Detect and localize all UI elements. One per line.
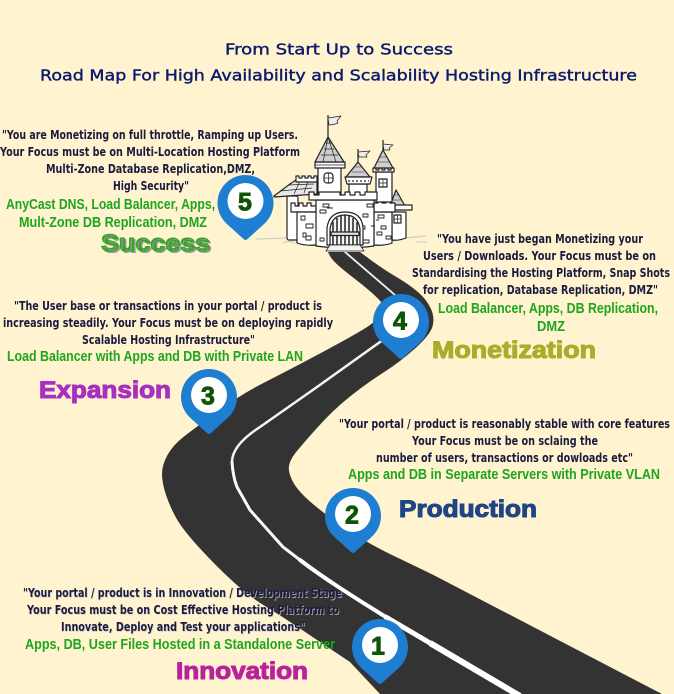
innovation infrastructure: Apps, DB, User Files Hosted in a Standalone Server xyxy=(25,636,335,653)
panel: innovation stage xyxy=(23,586,342,685)
success description xyxy=(0,128,300,193)
icon: pin 5 xyxy=(218,175,274,240)
success description: Multi-Zone Database Replication,DMZ, xyxy=(46,162,255,176)
success description: Your Focus must be on Multi-Location Hosting Platform xyxy=(0,145,300,159)
expansion description xyxy=(3,299,333,347)
expansion description: increasing steadily. Your Focus must be on deploying rapidly xyxy=(3,316,333,330)
innovation description: Your Focus must be on Cost Effective Hosting Platform to xyxy=(26,603,339,617)
monetization heading: Monetization xyxy=(432,337,596,364)
expansion infrastructure: Load Balancer with Apps and DB with Private LAN xyxy=(7,348,303,365)
icon: pin 2 xyxy=(325,488,381,553)
icon: pin 3 xyxy=(181,369,237,434)
icon: pin 3: 3 xyxy=(201,382,215,410)
innovation description: "Your portal / product is in Innovation / Development Stage xyxy=(23,586,342,600)
production description xyxy=(339,417,670,465)
success infrastructure: Mult-Zone DB Replication, DMZ xyxy=(19,214,207,231)
panel: monetization stage xyxy=(412,232,670,364)
icon: castle xyxy=(256,115,427,251)
icon: pin 1 xyxy=(352,619,408,684)
monetization description xyxy=(412,232,670,297)
title xyxy=(40,40,637,84)
icon: pin 2: 2 xyxy=(345,502,359,530)
monetization infrastructure: DMZ xyxy=(537,318,565,335)
success description: "You are Monetizing on full throttle, Ramping up Users. xyxy=(2,128,298,142)
title: Road Map For High Availability and Scalability Hosting Infrastructure xyxy=(40,66,637,84)
icon: pin 5: 5 xyxy=(238,188,252,216)
innovation description xyxy=(23,586,342,634)
expansion heading: Expansion xyxy=(39,377,171,404)
innovation description: Innovate, Deploy and Test your applications" xyxy=(61,620,305,634)
success heading: Success xyxy=(101,230,210,257)
panel: production stage xyxy=(339,417,670,523)
expansion description: "The User base or transactions in your portal / product is xyxy=(14,299,322,313)
success infrastructure xyxy=(6,196,215,231)
icon: pin 1: 1 xyxy=(371,632,385,660)
success description: High Security" xyxy=(113,179,189,193)
icon: pin 4: 4 xyxy=(393,308,407,336)
monetization infrastructure xyxy=(438,300,658,335)
panel: success stage xyxy=(0,128,300,257)
production heading: Production xyxy=(399,496,537,523)
innovation heading: Innovation xyxy=(176,658,308,685)
road xyxy=(162,252,662,694)
success infrastructure: AnyCast DNS, Load Balancer, Apps, xyxy=(6,196,215,213)
title: From Start Up to Success xyxy=(225,40,453,58)
panel: expansion stage xyxy=(3,299,333,404)
expansion description: Scalable Hosting Infrastructure" xyxy=(82,333,255,347)
icon: pin 4 xyxy=(373,294,429,359)
production description: Your Focus must be on sclaing the xyxy=(411,434,598,448)
